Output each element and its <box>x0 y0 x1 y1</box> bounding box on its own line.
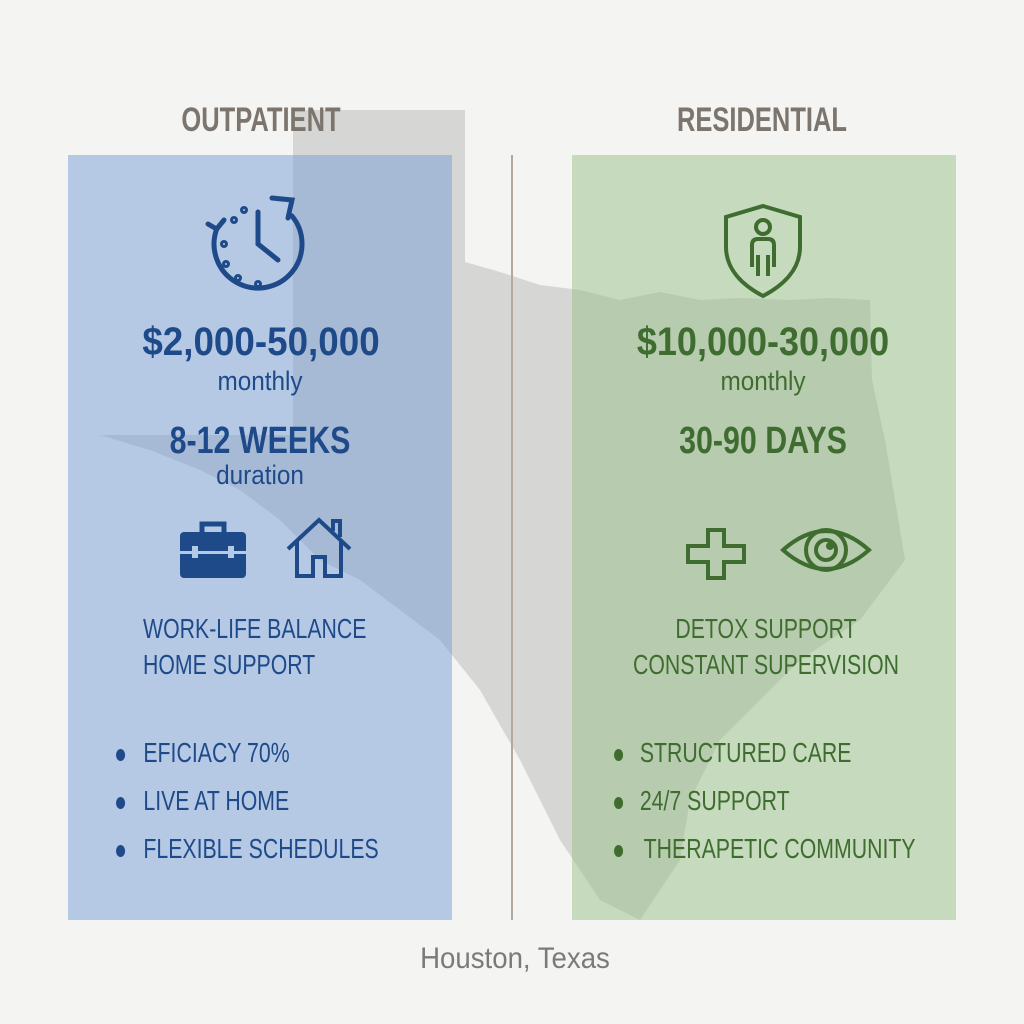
text: residential duration: 30-90 DAYS <box>679 420 847 462</box>
text: monthly <box>217 366 303 396</box>
panel: residential <box>572 155 956 920</box>
icon: house <box>286 517 352 578</box>
text: outpatient benefits: HOME SUPPORT <box>143 649 315 680</box>
list: outpatient: EFICIACY 70% <box>143 737 290 768</box>
text: residential benefits <box>633 613 899 680</box>
heading: residential: RESIDENTIAL <box>677 101 847 139</box>
list: outpatient: LIVE AT HOME <box>143 785 289 816</box>
icon: briefcase <box>180 522 246 578</box>
panel: outpatient <box>68 155 452 920</box>
heading: outpatient: OUTPATIENT <box>181 101 341 139</box>
text: residential benefits: DETOX SUPPORT <box>675 613 857 644</box>
text: monthly <box>720 366 806 396</box>
footer: location: Houston, Texas <box>420 942 610 975</box>
text: outpatient duration: 8-12 WEEKS <box>170 420 350 462</box>
list: residential: STRUCTURED CARE <box>640 737 851 768</box>
icon: cross <box>686 528 746 580</box>
list: residential: THERAPETIC COMMUNITY <box>644 833 916 864</box>
text: residential benefits: CONSTANT SUPERVISION <box>633 649 899 680</box>
text: outpatient benefits <box>143 613 366 680</box>
list: outpatient: FLEXIBLE SCHEDULES <box>143 833 379 864</box>
icon: shield person <box>724 204 802 298</box>
icon: eye <box>780 528 872 572</box>
icon: clock <box>206 196 305 291</box>
list: outpatient <box>116 737 379 864</box>
list: residential: 24/7 SUPPORT <box>640 785 790 816</box>
list: residential <box>614 737 916 864</box>
text: outpatient cost: $2,000-50,000 <box>142 320 380 364</box>
text: residential cost: $10,000-30,000 <box>637 320 889 364</box>
text: duration <box>216 460 304 490</box>
text: outpatient benefits: WORK-LIFE BALANCE <box>143 613 366 644</box>
